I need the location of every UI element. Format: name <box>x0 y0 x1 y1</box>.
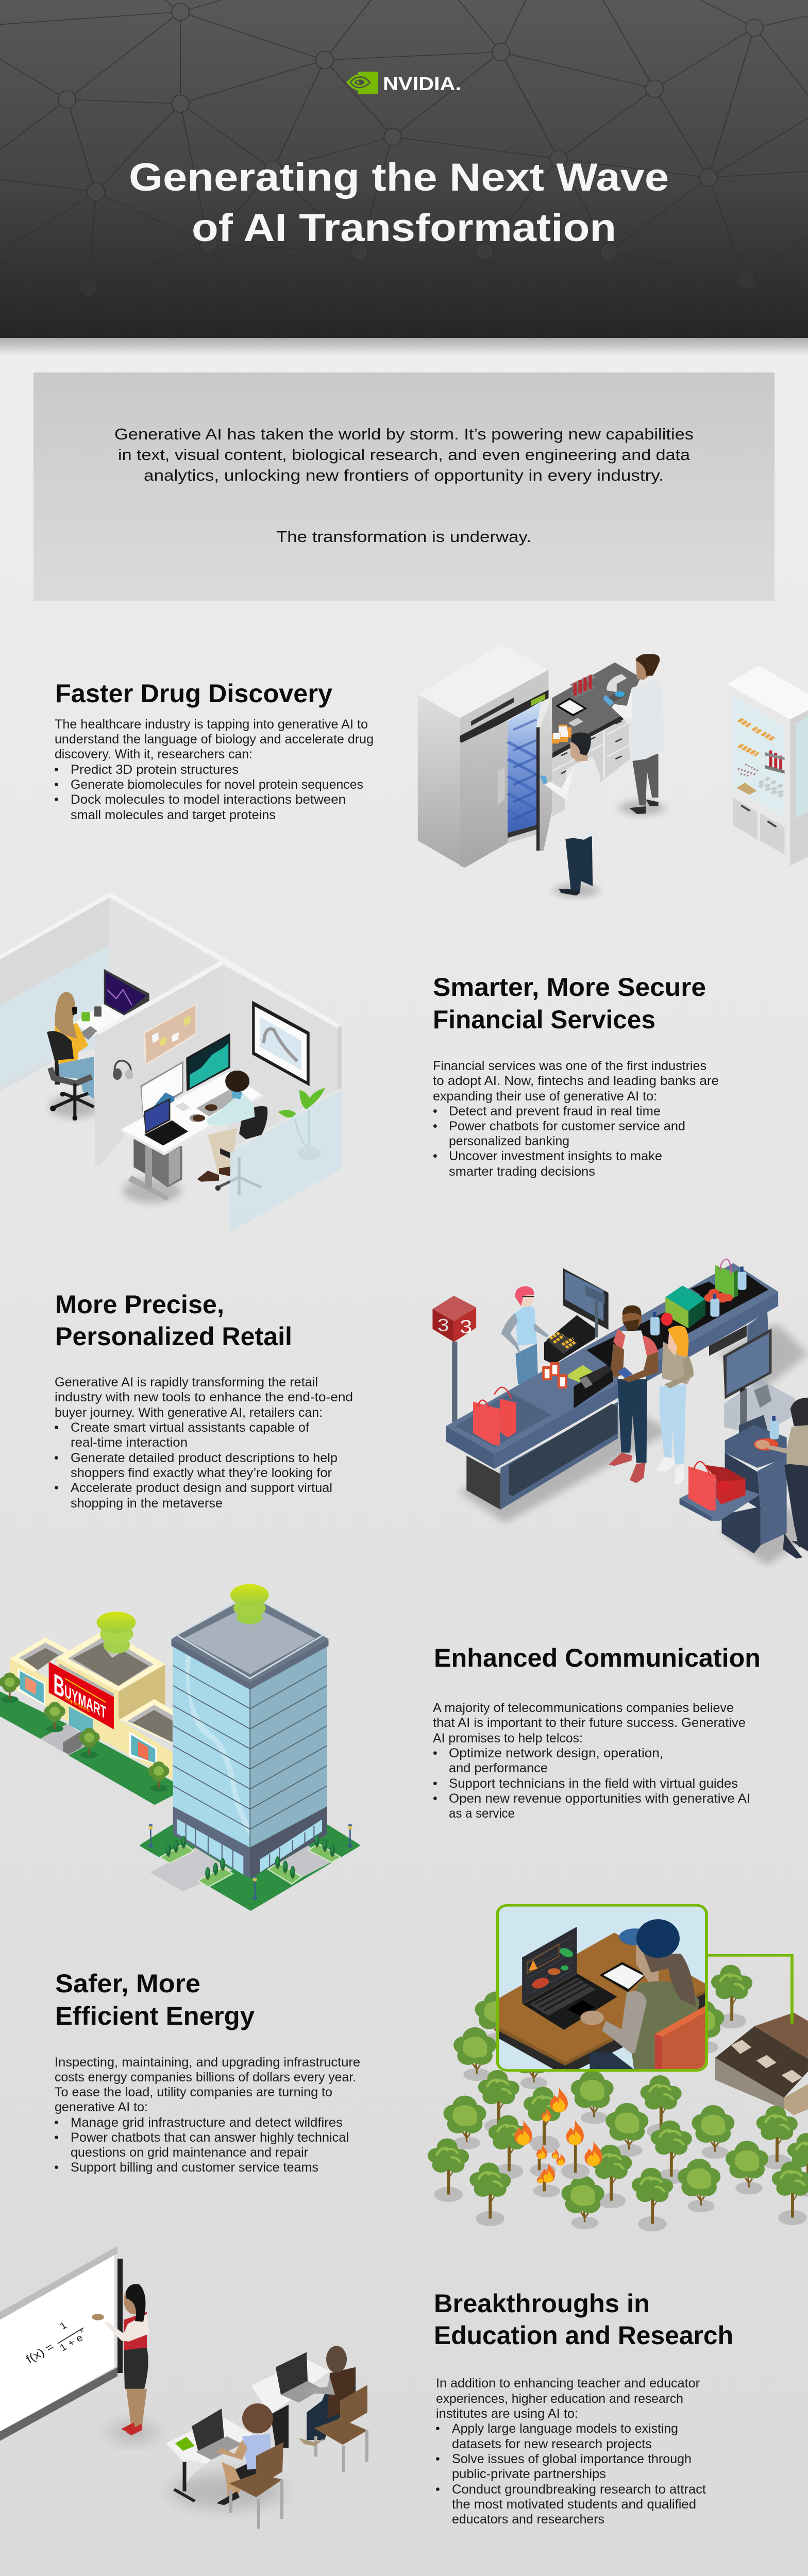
body text: In addition to enhancing teacher and educator <box>436 2376 700 2391</box>
store sign <box>49 1662 114 1730</box>
body text: • <box>435 2482 440 2497</box>
microscope <box>602 674 627 704</box>
panel: enhanced communication <box>0 1584 761 1909</box>
test tube rack <box>570 674 596 698</box>
whiteboard: f(x) = <box>23 2341 58 2365</box>
body text: • <box>433 1746 437 1760</box>
body text: Conduct groundbreaking research to attract <box>452 2482 706 2497</box>
illustration: office cubicles <box>0 892 342 1232</box>
body text: • <box>54 1481 59 1495</box>
street lamps <box>148 1824 352 1900</box>
body text: experiences, higher education and research <box>436 2392 683 2406</box>
body text: • <box>435 2421 440 2436</box>
panel: financial services <box>0 892 719 1232</box>
illustration: store and tower with 5G signals <box>0 1584 358 1909</box>
body text: • <box>54 2160 59 2175</box>
logo: NVIDIA: NVIDIA. <box>383 73 461 94</box>
student at front desk <box>166 2403 283 2529</box>
heading: Education and Research <box>434 2321 733 2350</box>
network pattern <box>0 0 808 338</box>
body text: Generate detailed product descriptions to help <box>71 1451 338 1465</box>
burnt trees and flames <box>514 2087 602 2197</box>
store sign: UYMART <box>64 1681 106 1723</box>
pill bottles <box>551 718 583 743</box>
heading <box>434 2289 733 2350</box>
body text: that AI is important to their future success. Generative <box>433 1716 746 1730</box>
body text: • <box>433 1791 437 1806</box>
student at back desk <box>251 2346 367 2471</box>
body text: The healthcare industry is tapping into generative AI to <box>55 717 368 732</box>
shopping bags <box>473 1387 516 1446</box>
body text: • <box>435 2452 440 2466</box>
number sign: 3 <box>437 1315 449 1335</box>
number sign: 3 <box>460 1317 472 1337</box>
body text: Support billing and customer service teams <box>71 2160 318 2175</box>
body text: Generative AI is rapidly transforming the retail <box>55 1375 318 1389</box>
body text: shoppers find exactly what they’re looking for <box>71 1466 332 1480</box>
title: of AI Transformation <box>192 206 616 250</box>
body text: Financial services was one of the first industries <box>433 1059 706 1073</box>
heading <box>433 973 706 1034</box>
body text: expanding their use of generative AI to: <box>433 1089 657 1104</box>
body text: as a service <box>449 1806 515 1821</box>
body text: Manage grid infrastructure and detect wildfires <box>71 2115 343 2130</box>
body text: • <box>433 1149 437 1163</box>
body text: Power chatbots for customer service and <box>449 1119 685 1133</box>
self checkout <box>680 1328 795 1553</box>
body text: • <box>54 2130 59 2145</box>
heading: Smarter, More Secure <box>433 973 706 1002</box>
body text: institutes are using AI to: <box>436 2406 578 2421</box>
body text: Open new revenue opportunities with generative AI <box>449 1791 750 1806</box>
body text: smarter trading decisions <box>449 1164 595 1179</box>
body text: Predict 3D protein structures <box>71 762 239 777</box>
tower lawn <box>142 1826 358 1909</box>
panel: header <box>0 0 808 338</box>
body text: • <box>433 1776 437 1791</box>
body text: • <box>54 792 59 807</box>
body text: To ease the load, utility companies are turning to <box>55 2085 332 2099</box>
counter <box>552 663 641 817</box>
heading: Enhanced Communication <box>434 1643 761 1672</box>
illustration: wildfire detection in forest <box>428 1905 808 2231</box>
whiteboard: 1 + e <box>57 2333 86 2353</box>
body text: industry with new tools to enhance the end-to-end <box>55 1390 353 1404</box>
body text: the most motivated students and qualified <box>452 2497 696 2512</box>
panel: faster drug discovery <box>54 645 808 897</box>
intro text: in text, visual content, biological research, and even engineering and data <box>118 446 691 464</box>
customer at self checkout <box>755 1398 808 1558</box>
body text: Solve issues of global importance through <box>452 2452 692 2466</box>
plant <box>278 1088 325 1160</box>
grocery items <box>650 1259 746 1335</box>
title <box>129 156 669 250</box>
office tower <box>172 1594 328 1878</box>
illustration: lab with freezer and researchers <box>418 645 808 897</box>
heading: More Precise, <box>55 1290 224 1319</box>
customer: man <box>609 1306 658 1483</box>
inset: analyst with laptop <box>497 1905 706 2076</box>
whiteboard: 1 <box>57 2320 70 2331</box>
body text: Optimize network design, operation, <box>449 1746 663 1760</box>
body text: discovery. With it, researchers can: <box>55 747 252 761</box>
scanner items <box>542 1362 613 1409</box>
number sign <box>432 1296 476 1422</box>
body text <box>54 717 374 822</box>
body text <box>435 2376 706 2527</box>
heading: Financial Services <box>433 1005 655 1034</box>
cabinet <box>727 666 808 866</box>
body text: AI promises to help telcos: <box>433 1731 583 1745</box>
body text: educators and researchers <box>452 2512 604 2527</box>
body text: Create smart virtual assistants capable of <box>71 1420 309 1435</box>
body text: • <box>54 762 59 777</box>
body text: shopping in the metaverse <box>71 1496 223 1511</box>
body text: real-time interaction <box>71 1435 188 1450</box>
body text: Dock molecules to model interactions between <box>71 792 346 807</box>
clipboard <box>556 698 587 717</box>
signal cone on tower <box>230 1584 269 1624</box>
heading: Safer, More <box>55 1969 200 1998</box>
body text: • <box>433 1104 437 1118</box>
whiteboard: -x <box>77 2328 86 2335</box>
body text: • <box>433 1119 437 1133</box>
body text: • <box>54 1451 59 1465</box>
body text: personalized banking <box>449 1134 569 1148</box>
logo: NVIDIA <box>346 72 461 94</box>
body text: small molecules and target proteins <box>71 808 276 822</box>
body text: Accelerate product design and support virtual <box>71 1481 332 1495</box>
body text: Power chatbots that can answer highly technical <box>71 2130 349 2145</box>
back walls <box>0 892 342 1149</box>
woman at desk <box>47 969 149 1121</box>
heading: Faster Drug Discovery <box>55 679 332 708</box>
researcher: man <box>540 733 600 897</box>
store sign: B <box>54 1667 64 1705</box>
headphones <box>113 1061 133 1080</box>
heading: Personalized Retail <box>55 1322 292 1351</box>
body text: costs energy companies billions of dollars every year. <box>55 2070 356 2084</box>
title: Generating the Next Wave <box>129 156 669 199</box>
intro text: The transformation is underway. <box>276 528 531 546</box>
body text: to adopt AI. Now, fintechs and leading banks are <box>433 1074 719 1088</box>
heading: Breakthroughs in <box>434 2289 650 2318</box>
checkout counter <box>446 1263 778 1510</box>
corkboard <box>144 1003 197 1066</box>
body text: Uncover investment insights to make <box>449 1149 662 1163</box>
body text: Support technicians in the field with virtual guides <box>449 1776 738 1791</box>
body text: Apply large language models to existing <box>452 2421 678 2436</box>
body text: and performance <box>449 1761 548 1775</box>
body text: Inspecting, maintaining, and upgrading infrastructure <box>55 2055 360 2070</box>
heading <box>55 1969 255 2030</box>
panel: efficient energy <box>54 1905 808 2231</box>
building <box>715 2012 808 2115</box>
body text: • <box>54 1420 59 1435</box>
cashier <box>501 1286 549 1384</box>
researcher: woman <box>603 654 665 816</box>
body text: • <box>54 777 59 792</box>
teacher <box>92 2284 156 2443</box>
panel: education and research <box>0 2246 733 2529</box>
body text: generative AI to: <box>55 2100 148 2114</box>
body text <box>433 1701 750 1821</box>
intro text: Generative AI has taken the world by storm. It’s powering new capabilities <box>114 425 694 443</box>
body text: public-private partnerships <box>452 2467 606 2481</box>
illustration: classroom <box>0 2246 367 2529</box>
register and monitor <box>544 1268 609 1364</box>
whiteboard <box>0 2246 123 2441</box>
body text <box>433 1059 719 1179</box>
partition wall <box>95 961 225 1166</box>
body text <box>54 2055 360 2175</box>
freezer <box>418 645 552 868</box>
body text: Detect and prevent fraud in real time <box>449 1104 661 1118</box>
signal cone on store <box>96 1612 136 1658</box>
panel: personalized retail <box>54 1259 808 1566</box>
body text: Generate biomolecules for novel protein sequences <box>71 777 363 792</box>
heading <box>55 1290 292 1351</box>
framed art <box>252 1001 310 1086</box>
man at desk <box>121 1033 267 1203</box>
glass pane <box>230 1089 342 1232</box>
body text: questions on grid maintenance and repair <box>71 2145 308 2160</box>
supermarket <box>0 1629 175 1805</box>
body text: buyer journey. With generative AI, retailers can: <box>55 1405 323 1420</box>
body text: datasets for new research projects <box>452 2437 652 2451</box>
illustration: checkout counter <box>432 1259 808 1566</box>
intro text: analytics, unlocking new frontiers of opportunity in every industry. <box>144 466 664 484</box>
forest <box>428 1965 808 2231</box>
connector line <box>706 1955 792 2024</box>
body text: understand the language of biology and accelerate drug <box>55 732 374 747</box>
floor shadows <box>459 1323 808 1566</box>
body text: • <box>54 2115 59 2130</box>
planters <box>160 1835 341 1887</box>
body text <box>54 1375 353 1511</box>
customer: woman <box>655 1326 694 1485</box>
intro text <box>114 425 694 546</box>
panel: introduction <box>33 372 775 601</box>
store sign: SuperStore <box>65 1696 90 1714</box>
heading: Efficient Energy <box>55 2002 255 2030</box>
body text: A majority of telecommunications companies believe <box>433 1701 734 1715</box>
